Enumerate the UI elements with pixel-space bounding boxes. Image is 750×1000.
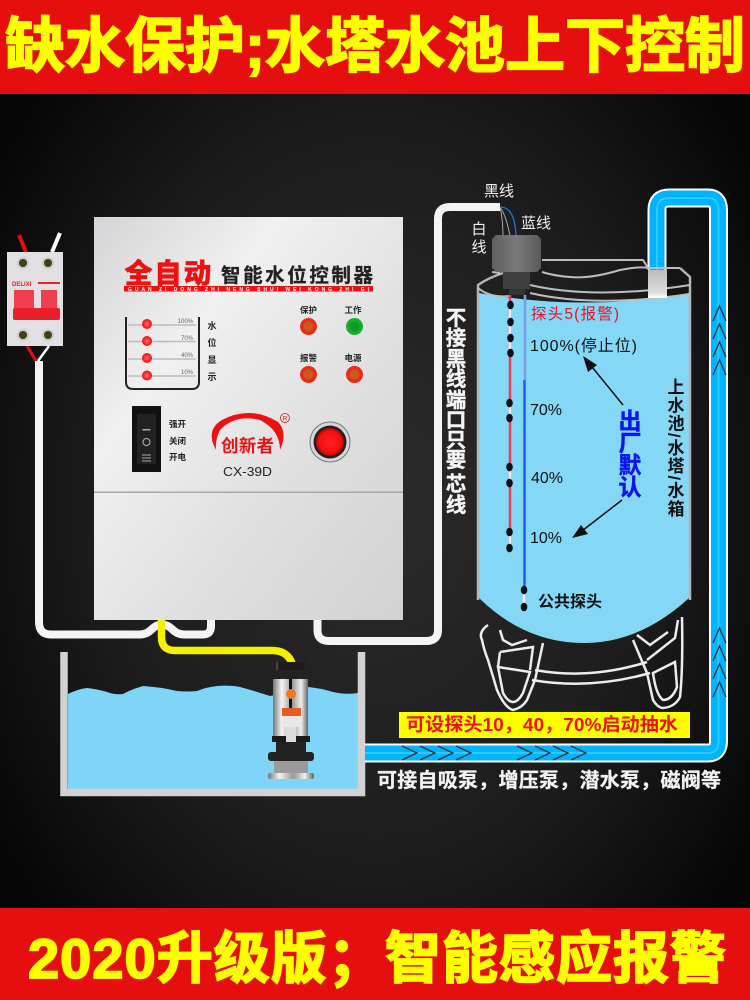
probe labels: 探头5(报警) [531, 305, 619, 323]
top banner [0, 0, 750, 94]
circuit breaker [7, 233, 63, 361]
factory default label: 出厂默认 [618, 408, 642, 500]
probe labels: 公共探头 [538, 593, 602, 611]
panel title: 智能水位控制器 [221, 264, 373, 287]
compatible pumps note: 可接自吸泵，增压泵，潜水泵，磁阀等 [377, 769, 721, 792]
wire colour labels: 线 [471, 239, 487, 256]
flow arrows vertical [713, 306, 726, 697]
brand logo: R [283, 416, 288, 422]
indicator lights: 保护 [300, 305, 317, 315]
arrow to 10 percent [572, 500, 622, 538]
indicator lights [300, 305, 363, 383]
probe labels: 10% [530, 530, 562, 547]
probe setting note: 可设探头10，40，70%启动抽水 [406, 714, 679, 735]
probe labels: 70% [530, 402, 562, 419]
blue water pipe [365, 198, 726, 760]
indicator lights: 报警 [300, 353, 317, 363]
probe labels: 40% [531, 470, 563, 487]
wire colour labels: 黑线 [484, 183, 514, 200]
cable note vertical label: 不接黑线端口只要芯线 [446, 307, 466, 517]
pipe fitting [648, 270, 667, 298]
white power cable [39, 361, 211, 634]
water level display: 水 [207, 320, 217, 331]
panel title [124, 259, 373, 293]
red probe line with beads [506, 295, 514, 552]
water level display: 70% [181, 336, 194, 342]
water level display: 示 [207, 372, 217, 382]
water basin [64, 652, 362, 792]
sensor head with wires [492, 207, 541, 295]
tank legs [481, 617, 682, 710]
arrow to 100 percent [583, 356, 623, 405]
rocker switch: 开电 [169, 452, 187, 462]
model number: CX-39D [223, 464, 272, 479]
wire colour labels: 蓝线 [521, 215, 551, 232]
rocker switch: 关闭 [169, 436, 186, 446]
water level display: 10% [181, 370, 194, 376]
red push button [310, 422, 350, 462]
brand logo [212, 413, 290, 479]
water level display [126, 317, 217, 389]
breaker brand: DELIXI [12, 282, 32, 288]
flow arrows horizontal [402, 746, 586, 760]
banner slogan: 2020升级版；智能感应报警 [28, 927, 726, 990]
probe labels: 100%(停止位) [530, 337, 637, 355]
controller panel [94, 217, 403, 620]
indicator lights: 工作 [344, 305, 362, 315]
water tank [478, 260, 690, 710]
indicator lights: 电源 [344, 353, 362, 363]
rocker switch: 强开 [169, 419, 187, 429]
water level display: 100% [178, 319, 194, 325]
rocker switch [132, 406, 187, 472]
yellow pump cable [162, 618, 292, 663]
probe labels [530, 305, 637, 611]
brand logo: 创新者 [221, 436, 274, 456]
bottom banner [0, 908, 750, 1000]
water level display: 显 [207, 355, 217, 365]
banner title: 缺水保护;水塔水池上下控制 [5, 13, 745, 80]
water level display: 位 [207, 337, 217, 348]
wire colour labels: 白 [471, 221, 487, 238]
upper tank vertical label: 上水池/水塔/水箱 [664, 378, 684, 518]
submersible pump [268, 648, 318, 779]
panel title: GUAN ZI DONG ZHI NENG SHUI WEI KONG ZHI GI [128, 287, 370, 293]
wire colour labels [471, 183, 551, 256]
blue probe line with beads [521, 295, 527, 611]
water level display: 40% [181, 353, 194, 359]
white sensor cable [318, 207, 500, 641]
panel title: 全自动 [125, 259, 211, 289]
